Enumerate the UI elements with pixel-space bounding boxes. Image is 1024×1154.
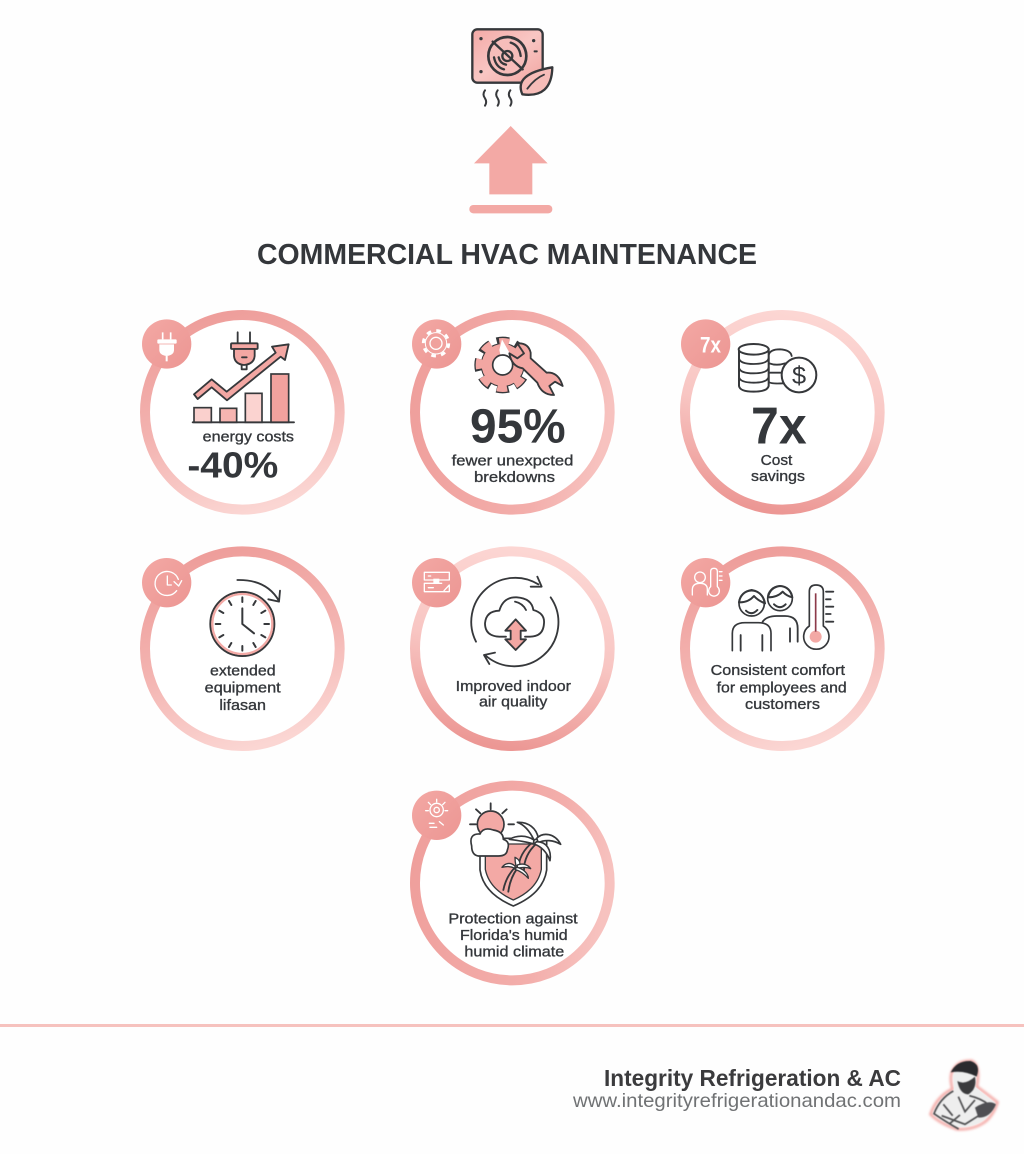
label: Protection against <box>448 910 579 927</box>
footer: website: www.integrityrefrigerationandac.com <box>572 1090 901 1112</box>
label <box>448 910 579 961</box>
badge: clock <box>142 558 191 607</box>
badge: person and thermometer <box>681 558 730 607</box>
stat: 7x <box>751 397 807 455</box>
icon: HVAC unit with leaf <box>472 29 552 106</box>
panel: energy costs <box>142 315 340 510</box>
label <box>711 662 847 713</box>
label: fewer unexpcted <box>452 453 573 470</box>
panel: indoor air quality <box>412 551 610 746</box>
panel: equipment lifespan <box>142 551 340 746</box>
label: Consistent comfort <box>711 662 846 679</box>
label <box>751 452 805 485</box>
arrow: up <box>469 126 552 213</box>
panel: consistent comfort <box>681 551 880 746</box>
label: energy costs <box>203 429 294 446</box>
badge: sun <box>412 791 461 840</box>
label: Cost <box>761 452 793 469</box>
label <box>205 663 282 714</box>
badge: gear <box>412 319 461 369</box>
label <box>452 453 573 486</box>
badge: 7x <box>681 319 730 369</box>
icon: gear and wrench <box>479 339 563 395</box>
icon: air cycle with cloud <box>471 577 558 666</box>
icon: leaf <box>521 67 552 95</box>
icon: clock with arrow <box>210 580 280 656</box>
badge: plug <box>142 319 191 369</box>
panel: fewer breakdowns <box>412 315 610 510</box>
panel: Florida climate protection <box>412 786 610 980</box>
logo: technician portrait <box>931 1061 997 1129</box>
label: savings <box>751 468 805 485</box>
icon: thermometer <box>804 585 833 649</box>
icon: coins and dollar: $ <box>792 362 806 390</box>
label: brekdowns <box>474 469 555 486</box>
label: Improved indoor <box>456 678 571 695</box>
label: air quality <box>479 694 548 711</box>
icon: people <box>732 586 798 651</box>
icon: coins and dollar <box>739 344 816 392</box>
panel: cost savings <box>681 315 880 510</box>
stat: -40% <box>187 445 278 486</box>
badge: 7x: 7x <box>700 332 722 357</box>
label: lifasan <box>219 697 266 714</box>
label: equipment <box>205 680 282 697</box>
footer: company name: Integrity Refrigeration & AC <box>604 1065 901 1091</box>
stat: 95% <box>470 401 566 454</box>
icon: shield with palms <box>471 822 561 906</box>
label: humid climate <box>464 944 564 961</box>
title: COMMERCIAL HVAC MAINTENANCE <box>257 239 757 271</box>
label: Florida's humid <box>460 927 568 944</box>
icon: sun <box>470 803 514 838</box>
label: extended <box>210 663 276 680</box>
label <box>456 678 571 711</box>
icon: plug <box>231 332 258 369</box>
label: for employees and <box>717 679 847 696</box>
label: customers <box>745 696 820 713</box>
icon: rising arrow chart <box>193 344 294 422</box>
badge: air filter <box>412 558 461 607</box>
